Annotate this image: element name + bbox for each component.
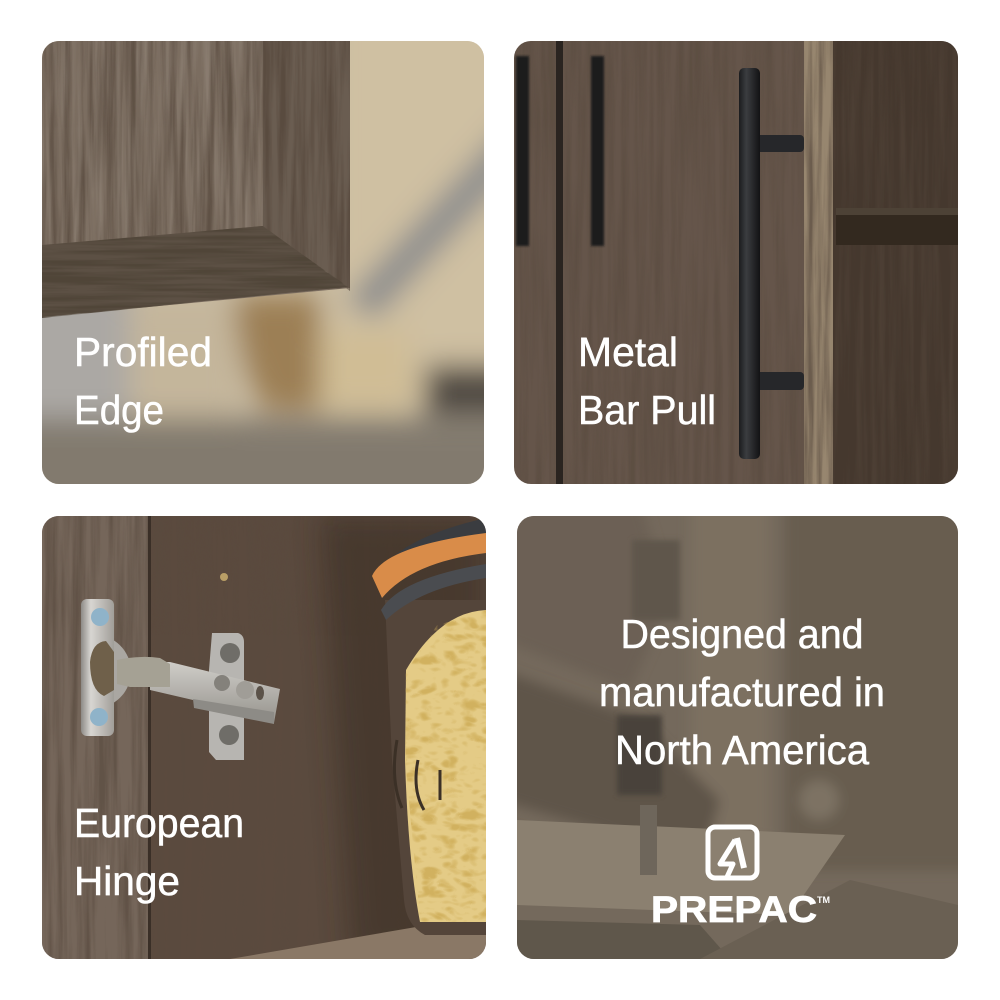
icon: european hinge <box>81 599 280 760</box>
icon: bar pull <box>739 68 804 459</box>
text: designed and manufactured in north america: North America <box>615 727 869 773</box>
text: designed and manufactured in north america: Designed and <box>620 611 864 657</box>
text: prepac wordmark: PREPAC <box>651 889 817 930</box>
text: designed and manufactured in north america <box>601 618 883 765</box>
heading: profiled: Profiled <box>74 329 212 375</box>
panel: metal bar pull <box>514 41 958 484</box>
text: trademark: TM <box>817 895 830 905</box>
icon: jar of pasta <box>372 518 486 935</box>
icon: prepac logo <box>708 827 757 878</box>
heading: metal: Metal <box>578 329 678 375</box>
panel: european hinge <box>42 516 486 959</box>
text: designed and manufactured in north america: manufactured in <box>599 669 885 715</box>
heading: edge: Edge <box>74 387 164 433</box>
panel: designed and manufactured <box>517 516 958 959</box>
heading: hinge: Hinge <box>74 858 180 904</box>
heading: bar pull: Bar Pull <box>578 387 716 433</box>
panel: profiled edge <box>42 41 484 484</box>
heading: european: European <box>74 800 244 846</box>
